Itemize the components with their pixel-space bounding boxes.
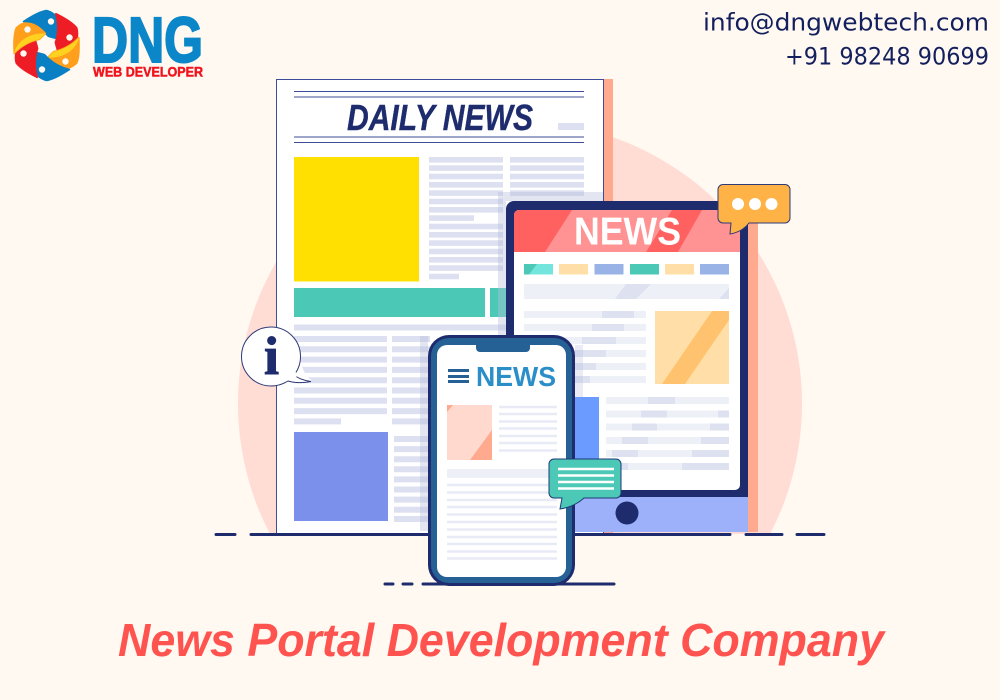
tablet category swatches: [524, 264, 729, 274]
contact phone: +91 98248 90699: [785, 42, 989, 70]
tablet article lines: [524, 284, 729, 466]
phone heading: NEWS: NEWS: [476, 361, 556, 392]
phone notch: [476, 345, 530, 352]
logo tagline: Web Developer: WEB DEVELOPER: [93, 64, 203, 80]
icon: teal chat bubble: [549, 459, 621, 509]
newspaper text columns: [429, 160, 584, 276]
info letter i: i: [264, 326, 279, 386]
contact email: info@dngwebtech.com: [703, 8, 989, 36]
newspaper yellow picture: [294, 157, 419, 282]
tablet header: [514, 210, 740, 254]
title: News Portal Development Company: [118, 614, 886, 666]
icon: pinwheel logo mark: [5, 8, 88, 83]
phone menu icon: [448, 370, 469, 382]
icon: info speech bubble: [242, 326, 312, 386]
tablet blue picture: [575, 397, 599, 460]
phone picture: [447, 405, 492, 460]
panel: smartphone: [428, 335, 575, 586]
phone article lines: [447, 407, 557, 558]
panel: newspaper: [276, 79, 613, 534]
newspaper masthead: DAILY NEWS: [347, 97, 533, 138]
ground lines: [216, 534, 824, 584]
newspaper lower text columns: [294, 328, 510, 519]
tablet home button: [616, 502, 638, 524]
newspaper blue picture: [294, 432, 388, 521]
tablet heading: NEWS: NEWS: [574, 210, 681, 254]
background circle: [238, 122, 802, 534]
icon: orange chat bubble: [718, 184, 790, 234]
panel: tablet: [506, 201, 758, 532]
newspaper teal banner: [294, 288, 510, 317]
tablet picture: [655, 311, 729, 384]
logo: DNG Web Developer: [5, 4, 203, 83]
contact details: [703, 8, 989, 70]
logo wordmark: DNG: DNG: [92, 4, 203, 76]
